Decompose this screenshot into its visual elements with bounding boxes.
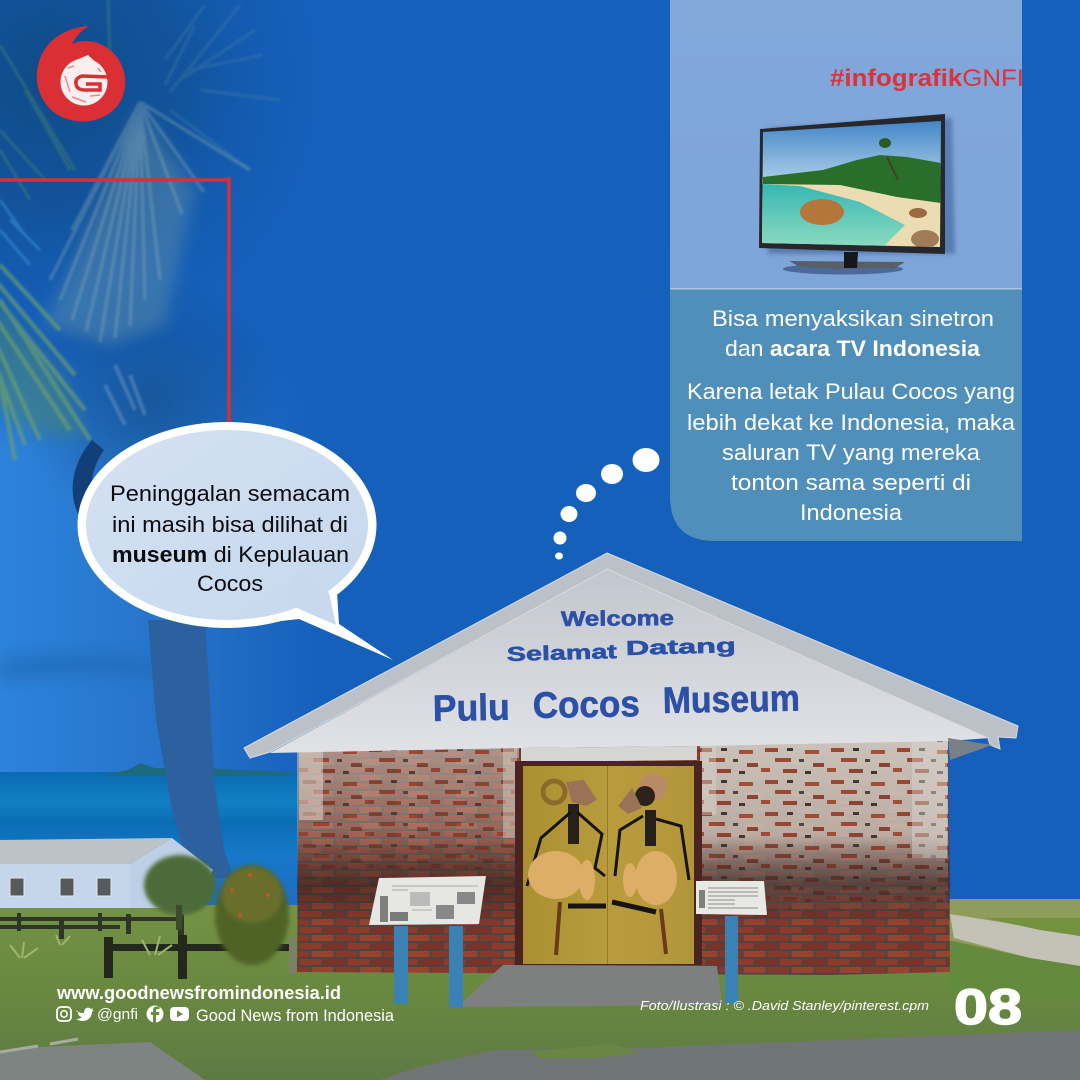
speech bubble (78, 422, 393, 660)
bubble text: Cocos (197, 571, 263, 596)
panel: text block (670, 288, 1022, 541)
ground: paved road at the bottom (0, 1030, 1080, 1080)
footer: website: www.goodnewsfromindonesia.id (56, 983, 341, 1003)
roof edge (244, 553, 1018, 758)
icon: twitter (76, 1008, 94, 1021)
sign: Pulu Cocos Museum: Pulu (432, 687, 510, 729)
panel: TV image area (670, 0, 1022, 288)
sign: Pulu Cocos Museum (432, 678, 800, 729)
bubble text: Peninggalan semacam (110, 481, 350, 506)
brick wall (297, 737, 950, 975)
page number: 08 (954, 979, 1022, 1035)
photo credit: Foto/Ilustrasi : © .David Stanley/pinterest.cpm (640, 998, 929, 1013)
bubble text: museum di Kepulauan (112, 542, 349, 567)
icon: instagram (57, 1007, 71, 1021)
left information board (369, 876, 486, 1007)
sign: Selamat Datang (507, 635, 736, 666)
panel body text: lebih dekat ke Indonesia, maka (687, 410, 1016, 435)
fences (0, 913, 296, 979)
shrubs (10, 855, 289, 965)
page name: Good News from Indonesia (196, 1006, 395, 1025)
panel heading: dan acara TV Indonesia (725, 336, 980, 361)
bubble text (110, 481, 350, 596)
background: beach scene with palm tree (0, 0, 298, 905)
sign: Pulu Cocos Museum: Cocos (532, 683, 640, 726)
sign: Selamat Datang: Datang (626, 635, 736, 660)
concrete step (457, 965, 722, 1007)
right information board (696, 881, 767, 1004)
panel body text (687, 379, 1016, 525)
footer: social media (57, 1006, 395, 1025)
panel heading (712, 306, 994, 361)
panel heading: Bisa menyaksikan sinetron (712, 306, 994, 331)
lintel above door (521, 746, 697, 762)
museum building (244, 553, 1018, 1007)
wayang figure right (612, 773, 689, 954)
icon: television (759, 114, 955, 274)
red frame line (0, 177, 229, 424)
ground: right-hand lawn and road (948, 899, 1080, 1000)
door with wayang figures (515, 761, 702, 965)
ground: grass and lawn (0, 880, 1080, 1080)
sign: Pulu Cocos Museum: Museum (662, 678, 800, 721)
bubble text: ini masih bisa dilihat di (112, 512, 348, 537)
panel body text: tonton sama seperti di (731, 470, 971, 495)
panel body text: Karena letak Pulau Cocos yang (687, 379, 1015, 404)
panel body text: Indonesia (800, 500, 902, 525)
background building: white house (0, 838, 213, 908)
icon: youtube (170, 1007, 189, 1021)
hashtag heading: #infografik GNFI (830, 65, 1024, 92)
icon: facebook (146, 1006, 164, 1023)
sign: Selamat Datang: Selamat (507, 641, 618, 666)
wayang figure left (527, 780, 606, 955)
panel body text: saluran TV yang mereka (722, 440, 981, 465)
sign: Welcome: Welcome (561, 607, 674, 631)
thought bubbles (554, 448, 660, 560)
roof gable (270, 569, 990, 753)
logo (37, 26, 125, 121)
handle: @gnfi (97, 1006, 138, 1023)
